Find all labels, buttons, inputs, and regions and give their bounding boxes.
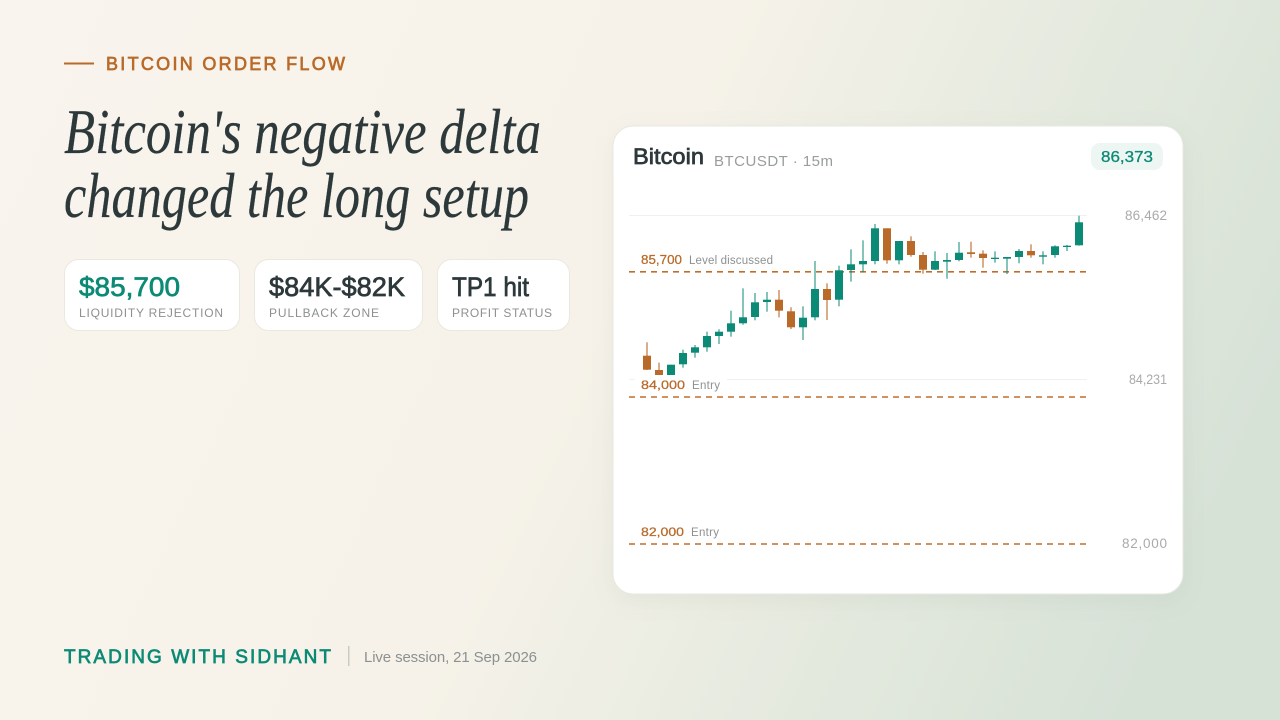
gridlines (629, 216, 1087, 380)
level line: 85,700: Level discussed (689, 255, 773, 267)
axis labels: 82,000 (1122, 536, 1167, 551)
footer brand: TRADING WITH SIDHANT (64, 647, 331, 668)
axis labels (1122, 208, 1167, 551)
stat card: pullback zone: PULLBACK ZONE (269, 306, 379, 320)
level line: 84,000 (629, 377, 1087, 397)
level line: 82,000: 82,000 (641, 525, 684, 539)
chart heading: Bitcoin (633, 144, 704, 169)
price badge: 86,373 (1101, 149, 1153, 166)
panel: chart card (613, 126, 1183, 594)
axis labels: 84,231 (1129, 372, 1167, 387)
level line: 84,000: Entry (692, 380, 720, 392)
stat card: pullback zone: $84K-$82K (269, 272, 405, 302)
stat card: profit status: PROFIT STATUS (452, 306, 552, 320)
level line: 85,700 (629, 253, 1087, 272)
stat card: pullback zone (254, 260, 422, 330)
symbol and timeframe: BTCUSDT · 15m (714, 153, 833, 170)
stat card: liquidity rejection: $85,700 (79, 272, 180, 302)
level line: 84,000: 84,000 (641, 378, 685, 392)
axis labels: 86,462 (1125, 208, 1167, 223)
title (64, 97, 541, 231)
title: changed the long setup (64, 161, 529, 231)
level line: 85,700: 85,700 (641, 253, 682, 267)
footer divider (348, 646, 350, 666)
card background (613, 126, 1183, 594)
level line: 82,000: Entry (691, 527, 719, 539)
price badge (1091, 143, 1163, 170)
stat card: profit status: TP1 hit (452, 272, 529, 302)
candlestick chart (643, 216, 1083, 375)
stat card: liquidity rejection: LIQUIDITY REJECTION (79, 306, 223, 320)
footer session date: Live session, 21 Sep 2026 (364, 649, 537, 666)
stat card: liquidity rejection (64, 260, 240, 330)
title: Bitcoin's negative delta (64, 97, 541, 167)
eyebrow: BITCOIN ORDER FLOW (106, 54, 345, 74)
level line: 82,000 (629, 525, 1087, 544)
stat card: profit status (438, 260, 570, 330)
